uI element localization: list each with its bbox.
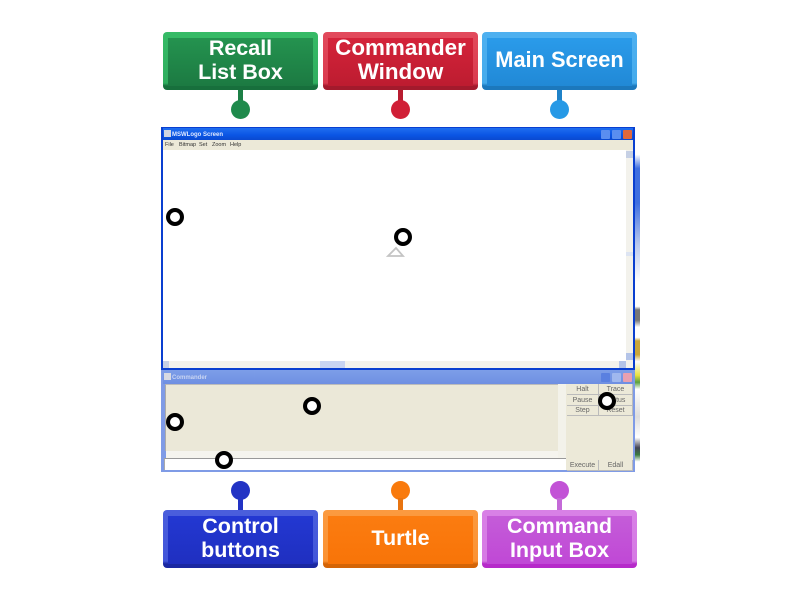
command input box [164, 458, 566, 470]
marker: turtle [394, 228, 412, 246]
label: Recall List Box [163, 32, 318, 90]
label: Command Input Box: Input Box [510, 538, 609, 562]
pin: Command Input Box [550, 481, 569, 510]
menu bar [163, 140, 633, 150]
recall list box [165, 384, 559, 451]
label: Main Screen [482, 32, 637, 90]
control panel: Execute [570, 462, 595, 469]
label: Turtle: Turtle [371, 526, 430, 550]
label: Command Input Box [482, 510, 637, 568]
label: Turtle [323, 510, 478, 568]
label: Commander Window: Window [358, 59, 443, 84]
label: Commander Window: Commander [335, 35, 466, 60]
MSWLogo screenshot [161, 127, 640, 472]
commander window [161, 370, 635, 472]
label: Control buttons: Control [202, 514, 279, 538]
horizontal scrollbar [163, 361, 626, 368]
pin: Control buttons [231, 481, 250, 510]
drawing area [163, 150, 626, 361]
label: Control buttons [163, 510, 318, 568]
menu bar: Zoom [212, 142, 226, 148]
label: Commander Window [323, 32, 478, 90]
label: Command Input Box: Command [507, 514, 612, 538]
pin: Main Screen [550, 90, 569, 119]
marker: input box [215, 450, 233, 468]
pin: Turtle [391, 481, 410, 510]
marker: commander [166, 413, 184, 431]
control panel: Step [575, 407, 590, 414]
marker: control buttons [598, 392, 616, 410]
commander title bar [163, 370, 633, 384]
pin: Recall List Box [231, 90, 250, 119]
label: Control buttons: buttons [201, 538, 280, 562]
recall scrollbars [166, 451, 559, 458]
control panel: Pause [573, 397, 592, 404]
control panel: Halt [576, 386, 589, 393]
menu bar: File [165, 142, 174, 148]
label: Main Screen: Main Screen [495, 47, 624, 72]
marker: left main [166, 208, 184, 226]
marker: recall list [302, 396, 320, 414]
control panel: Trace [607, 386, 624, 393]
commander title: Commander [172, 375, 207, 381]
control panel: Reset [606, 407, 625, 414]
control panel: Status [606, 397, 625, 404]
menu bar: Help [230, 142, 241, 148]
window icon [164, 130, 171, 137]
control panel: Edall [608, 462, 623, 469]
title bar [163, 128, 633, 140]
menu bar: Bitmap [179, 142, 196, 148]
menu bar: Set [199, 142, 207, 148]
label: Recall List Box: List Box [198, 60, 283, 84]
pin: Commander Window [391, 90, 410, 119]
main window [161, 127, 635, 370]
turtle [386, 246, 405, 257]
window title: MSWLogo Screen [172, 132, 223, 138]
vertical scrollbar [626, 150, 633, 368]
right edge fragment [635, 127, 640, 472]
control panel [566, 384, 633, 470]
label: Recall List Box: Recall [209, 36, 272, 60]
